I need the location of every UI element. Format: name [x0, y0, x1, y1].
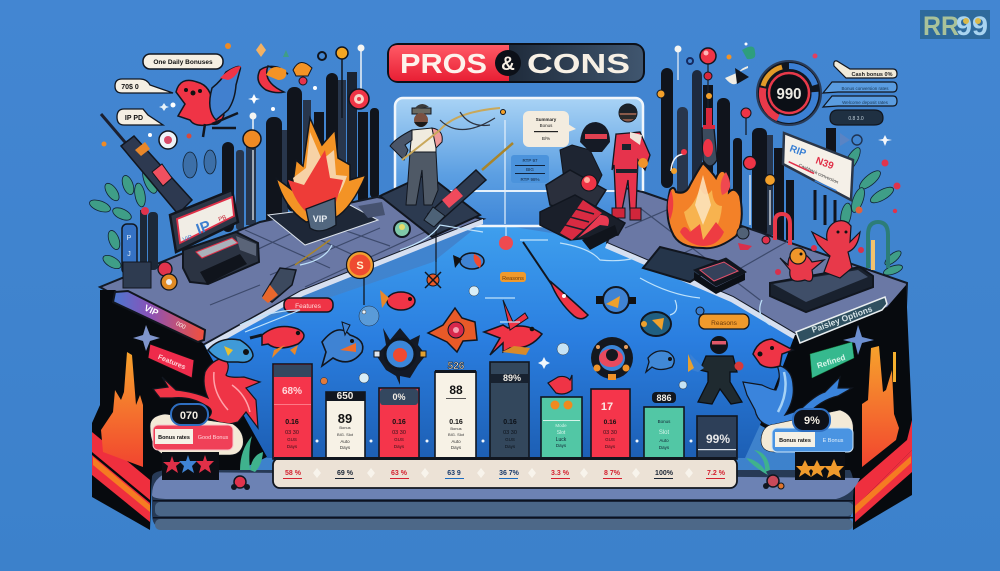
fish: blue small right — [646, 351, 674, 372]
black towers: right — [661, 68, 836, 248]
gauge legends: Welcome deposit rates — [842, 100, 889, 105]
red machine — [540, 195, 625, 250]
bar 6: Luck — [556, 437, 567, 443]
VIP console left — [122, 190, 259, 290]
VIP console left: IP — [194, 217, 213, 238]
bar 3: 0.16 — [392, 419, 406, 426]
figure: dark rider — [546, 122, 610, 215]
screen notes: RTP 98% — [520, 177, 540, 182]
signboard: RIP — [788, 143, 808, 160]
tag: red label: Features — [295, 303, 322, 310]
bar 7: 0.16 — [604, 419, 617, 426]
callout: right pill: 9% — [804, 415, 820, 427]
icon: right little cart — [763, 475, 784, 489]
bar 8: 886 — [656, 393, 672, 403]
title banner: PROS — [400, 48, 487, 79]
tag: small orange — [500, 272, 526, 282]
screen notes — [511, 155, 549, 183]
bar 9: 99% — [706, 432, 730, 446]
icon: teal leaves right — [746, 450, 770, 475]
speech bubble: B/% — [542, 136, 550, 141]
tag: orange label: Reasons — [711, 320, 738, 327]
tray of percentages: 69 % — [337, 470, 354, 477]
VIP console left: J — [127, 251, 131, 258]
icon: small red fish top — [258, 62, 312, 93]
rod: red in water — [523, 242, 588, 319]
bar 5: Days — [505, 444, 516, 449]
gauge legends: Bonus conversion rates — [841, 86, 889, 91]
bar 5: 89% — [503, 373, 521, 383]
bar 2 — [326, 391, 365, 459]
bar 1: 68% — [282, 386, 302, 397]
bar 8: Days — [659, 445, 670, 450]
title banner — [387, 43, 645, 83]
tag: red label — [284, 298, 333, 312]
red label — [148, 344, 194, 378]
screen notes: BIG — [526, 167, 534, 172]
bar 7: GUS — [605, 437, 615, 442]
bar 1 — [273, 364, 312, 459]
center pin rod — [657, 42, 892, 225]
bar 3 — [379, 388, 419, 459]
gauge legends: Cash bonus 0% — [852, 72, 893, 78]
right side wall — [760, 285, 912, 530]
icon: left stars — [162, 452, 219, 480]
bar 5 — [490, 362, 529, 459]
bar 2: Auto — [340, 439, 350, 444]
tray of percentages: 36 7% — [499, 470, 520, 477]
left wall banner: VIP — [143, 303, 160, 318]
tray of percentages: 3.3 % — [551, 470, 570, 477]
fish: dark round — [641, 312, 671, 336]
red knight and riot figure — [540, 104, 650, 250]
icon: side tower — [122, 224, 137, 274]
black towers: left — [222, 72, 379, 232]
gauge 990: 990 — [776, 86, 802, 103]
center fishing rod — [424, 143, 513, 262]
callout: left pill — [150, 404, 243, 455]
signboard: N39 — [814, 155, 835, 172]
tray of percentages: 8 7% — [604, 470, 621, 477]
tray of percentages: 7.2 % — [707, 470, 726, 477]
bar 2: Days — [340, 445, 351, 450]
VIP console left: P — [127, 235, 132, 242]
icon: red bobber — [499, 226, 513, 250]
bar 1: Days — [287, 444, 298, 449]
bar 8 — [644, 392, 684, 459]
bar 7: 17 — [601, 401, 613, 413]
fish: blue top right — [596, 287, 636, 313]
chart: left flame bars — [101, 352, 143, 467]
tray of percentages: 100% — [655, 470, 674, 477]
bar 3: GUS — [394, 437, 404, 442]
sea dragon: blue right — [743, 339, 852, 427]
bar 2: 650 — [337, 391, 354, 402]
tray of percentages: 63 9 — [447, 470, 461, 477]
fish: small crab — [548, 375, 572, 394]
icon: pins and dots left — [102, 43, 369, 220]
bar 5: 0.16 — [503, 419, 517, 426]
bar 6: Mode — [555, 423, 567, 428]
fish: red small top — [380, 290, 415, 310]
callout: right pill: E Bonus — [823, 438, 844, 444]
green label — [810, 342, 854, 378]
bar 5: 03 30 — [503, 430, 517, 436]
left callouts: 70$ 0 — [121, 84, 139, 91]
bar 4 — [435, 361, 476, 459]
right stone slab — [605, 188, 907, 345]
left wall banner — [113, 291, 205, 342]
icon: right stars — [795, 452, 845, 480]
angler on stage — [380, 104, 500, 237]
callout: left pill: 070 — [180, 410, 198, 422]
icon: teal leaves left — [240, 436, 263, 472]
left callouts: One Daily Bonuses — [153, 59, 213, 66]
logo: RR99: 99 — [956, 11, 988, 41]
tray of percentages: 63 % — [391, 470, 408, 477]
platform base — [152, 470, 860, 530]
callout: right pill — [761, 409, 853, 452]
bar 4: 88 — [449, 383, 463, 397]
tray of percentages — [273, 457, 737, 488]
icon: spider mine — [425, 262, 441, 288]
sea dragon: red left — [153, 339, 260, 428]
icon: red bird — [176, 66, 241, 137]
bar 3: 03 30 — [392, 430, 406, 436]
bar 4: Bonus — [450, 426, 462, 431]
bubbles — [320, 286, 687, 389]
fish: red long — [484, 300, 542, 355]
bar 5: GUS — [505, 437, 515, 442]
VIP badge: VIP — [313, 214, 327, 224]
left VIP flame — [268, 118, 410, 245]
right wall banner — [796, 297, 887, 343]
right flame — [667, 163, 742, 248]
right wall banner: Paisley Options — [810, 303, 874, 335]
rod in water left — [262, 240, 330, 303]
fish: blue left top — [453, 253, 484, 269]
left side wall — [92, 290, 267, 530]
icon: token 5 — [346, 252, 374, 305]
fish: blue — [322, 322, 363, 366]
bar 1: 03 30 — [285, 430, 299, 436]
bar 4: 526 — [448, 361, 465, 372]
gauge legends — [823, 61, 897, 125]
left callouts: IP PD — [125, 115, 143, 122]
sparkles — [316, 357, 692, 442]
logo: RR99 — [920, 10, 990, 41]
speech bubble — [523, 111, 576, 147]
bar 1: GUS — [287, 437, 297, 442]
speech bubble: Summary — [536, 117, 557, 122]
red label: Features — [157, 354, 186, 371]
icon: spiky fish — [428, 308, 477, 352]
water surface — [200, 222, 797, 458]
crab creatures — [737, 214, 888, 312]
green label: Refined — [816, 353, 847, 370]
bar 4: 0.16 — [449, 419, 463, 426]
icon: ring turret — [591, 337, 633, 380]
tag: small orange: Reasons — [502, 276, 524, 282]
gauge legends: 0.8 3.0 — [848, 116, 864, 122]
bar 8: Bonus — [658, 419, 671, 424]
logo: RR99: RR — [923, 11, 959, 41]
screen notes: RTP 97 — [522, 158, 538, 163]
bar 6 — [541, 397, 582, 459]
bar 2: BIG. Slot — [337, 432, 354, 437]
icon: gear fish — [374, 328, 426, 385]
left callouts — [115, 54, 223, 125]
bar 2: Bonus — [339, 425, 351, 430]
signboard: Cashback conversion — [798, 163, 840, 185]
tray of percentages: 58 % — [285, 470, 302, 477]
fish in water — [240, 225, 770, 442]
title banner: & — [501, 54, 515, 75]
bar 4: Days — [451, 445, 462, 450]
chart: right flame bars — [862, 346, 899, 467]
VIP console left: VIP — [182, 235, 193, 244]
figure: armored soldier — [688, 336, 744, 404]
bar 8: Slot — [659, 430, 670, 436]
title banner: CONS — [527, 48, 630, 79]
callout: right pill: Bonus rates — [779, 438, 811, 444]
left wall banner: 000 — [175, 321, 187, 331]
bar 7 — [591, 389, 630, 459]
speech bubble: Bonus — [540, 123, 553, 128]
figure: red suit — [612, 104, 650, 220]
callout: left pill: Bonus rates — [158, 435, 190, 441]
left fishing rod — [101, 114, 192, 214]
callout: left pill: Good Bonus — [198, 435, 229, 441]
screen panel — [395, 98, 643, 226]
bar 4: BIG. Slot — [448, 432, 465, 437]
VIP badge — [306, 198, 336, 231]
tag: orange label — [696, 307, 749, 329]
dark keypad — [643, 247, 746, 294]
left stone slab — [100, 197, 483, 350]
bar 7: Days — [605, 444, 616, 449]
plants: left — [88, 150, 216, 271]
bar 6: Days — [556, 443, 567, 448]
gauge 990 — [757, 61, 897, 125]
icon: left little cart — [231, 476, 250, 490]
bar 9 — [697, 416, 737, 459]
ripples — [240, 225, 770, 332]
VIP console left: PB — [218, 215, 227, 223]
bar 3: 0% — [392, 392, 406, 402]
bar 7: 03 30 — [603, 430, 617, 436]
bar 4: Auto — [451, 439, 461, 444]
fish: red tail left — [250, 321, 304, 358]
signboard — [783, 133, 900, 228]
bar 8: Auto — [659, 438, 669, 443]
plants: right — [839, 145, 904, 277]
bar 2: 89 — [338, 411, 352, 426]
bar 6: Slot — [557, 430, 566, 436]
bar 1: 0.16 — [285, 419, 299, 426]
icon: token 5: S — [356, 260, 364, 272]
bar chart — [273, 361, 737, 459]
bar 3: Days — [394, 444, 405, 449]
